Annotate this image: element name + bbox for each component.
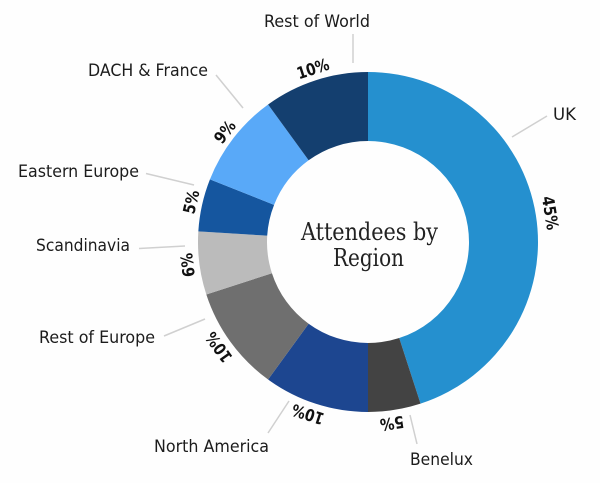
centre title xyxy=(300,217,438,272)
value: Rest of World 10%: 10% xyxy=(294,55,332,83)
segment: Scandinavia 6% xyxy=(198,231,272,295)
leader line: UK xyxy=(512,116,547,137)
label: Rest of Europe: Rest of Europe xyxy=(39,328,155,348)
label: Benelux: Benelux xyxy=(410,450,473,470)
segment: Rest of Europe 10% xyxy=(206,273,309,380)
segment: Eastern Europe 5% xyxy=(198,179,274,236)
label: Rest of World: Rest of World xyxy=(264,12,370,32)
segment: UK 45% xyxy=(368,72,538,404)
leader line: Scandinavia xyxy=(139,246,185,248)
leader line: Rest of World xyxy=(352,34,354,63)
label: Eastern Europe: Eastern Europe xyxy=(18,162,139,182)
leader line: Rest of Europe xyxy=(164,319,205,336)
value: Rest of Europe 10%: 10% xyxy=(201,328,236,366)
segment: North America 10% xyxy=(268,324,368,412)
centre title: Region xyxy=(333,243,404,272)
leader line: Benelux xyxy=(410,415,417,444)
value: Benelux 5%: 5% xyxy=(378,412,405,434)
value: North America 10%: 10% xyxy=(289,400,327,428)
value: Eastern Europe 5%: 5% xyxy=(180,188,204,216)
centre title: Attendees by xyxy=(300,217,438,246)
value: UK 45%: 45% xyxy=(538,195,562,232)
label: UK: UK xyxy=(553,105,577,125)
segment: DACH & France 9% xyxy=(210,104,309,205)
leader line: North America xyxy=(268,401,289,433)
segment: Rest of World 10% xyxy=(268,72,368,160)
value: DACH & France 9%: 9% xyxy=(210,116,240,147)
label: North America: North America xyxy=(154,437,269,457)
leader line: Eastern Europe xyxy=(146,174,194,185)
segment: Benelux 5% xyxy=(368,338,421,412)
label: Scandinavia: Scandinavia xyxy=(36,236,130,256)
label: DACH & France: DACH & France xyxy=(88,61,208,81)
value: Scandinavia 6%: 6% xyxy=(177,252,199,278)
leader line: DACH & France xyxy=(216,75,243,108)
